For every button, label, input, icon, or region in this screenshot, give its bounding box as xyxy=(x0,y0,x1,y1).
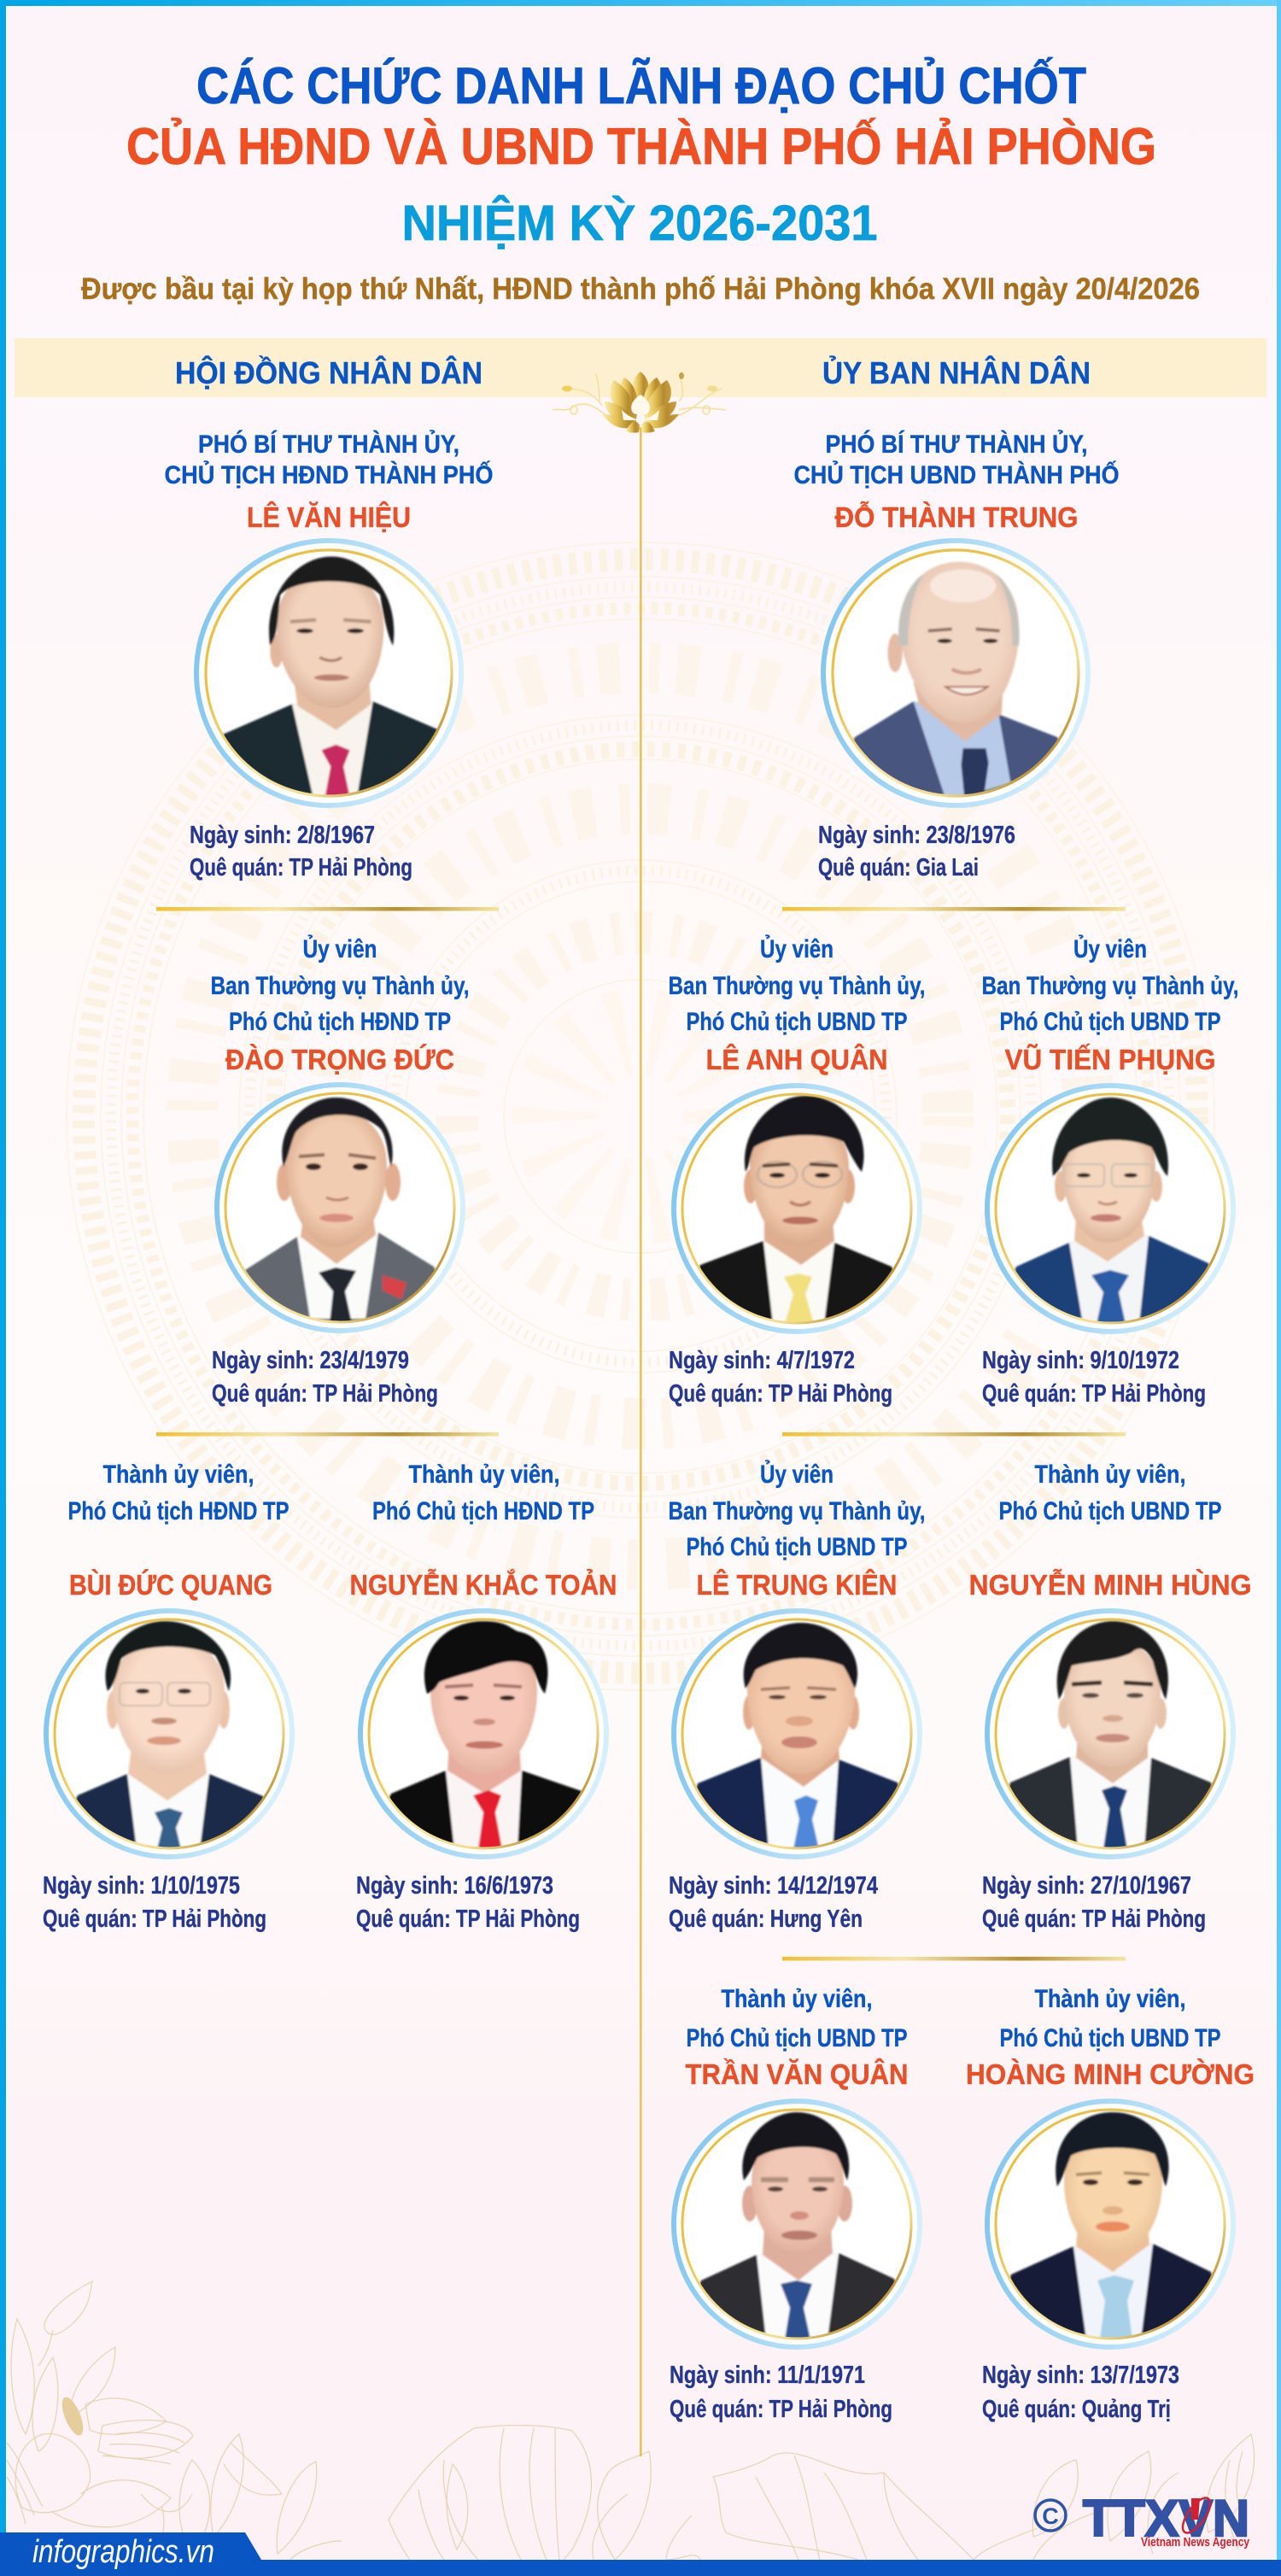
role: CHỦ TỊCH UBND THÀNH PHỐ xyxy=(794,460,1119,489)
person: Đào Trọng Đức xyxy=(210,934,470,1408)
info: Quê quán: TP Hải Phòng xyxy=(212,1380,438,1408)
role: Phó Chủ tịch UBND TP xyxy=(999,1008,1221,1036)
info: Quê quán: Gia Lai xyxy=(818,854,979,881)
info: Quê quán: TP Hải Phòng xyxy=(982,1380,1206,1408)
role: Ban Thường vụ Thành ủy, xyxy=(210,972,470,1000)
person: Trần Văn Quân xyxy=(670,1985,920,2423)
role xyxy=(687,1985,907,2052)
icon: golden lotus xyxy=(553,372,726,433)
role: Thành ủy viên, xyxy=(1035,1985,1185,2013)
portrait xyxy=(46,1611,292,1857)
info xyxy=(43,1872,266,1933)
name: LÊ ANH QUÂN xyxy=(705,1044,888,1075)
info: Ngày sinh: 27/10/1967 xyxy=(982,1872,1191,1900)
name: TRẦN VĂN QUÂN xyxy=(685,2058,909,2090)
name: HOÀNG MINH CƯỜNG xyxy=(966,2058,1255,2090)
logo: TTXVN: Vietnam News Agency xyxy=(1141,2535,1250,2550)
info: Quê quán: TP Hải Phòng xyxy=(190,854,412,881)
icon: copyright: C xyxy=(1042,2503,1059,2529)
person: Đỗ Thành Trung xyxy=(794,430,1119,881)
background: bronze drum pattern xyxy=(67,542,1214,1690)
role xyxy=(164,430,494,489)
title: CÁC CHỨC DANH LÃNH ĐẠO CHỦ CHỐT xyxy=(196,57,1086,114)
info: Ngày sinh: 13/7/1973 xyxy=(982,2362,1179,2389)
info: Quê quán: TP Hải Phòng xyxy=(43,1906,266,1933)
info xyxy=(982,1347,1206,1408)
name: NGUYỄN MINH HÙNG xyxy=(968,1569,1252,1601)
role xyxy=(982,934,1238,1036)
role: Phó Chủ tịch UBND TP xyxy=(687,2024,907,2052)
role: Thành ủy viên, xyxy=(1035,1461,1185,1489)
section band xyxy=(15,338,1266,397)
role: Phó Chủ tịch UBND TP xyxy=(687,1008,907,1036)
role: Thành ủy viên, xyxy=(102,1461,254,1489)
info: Ngày sinh: 14/12/1974 xyxy=(669,1872,878,1900)
name: ĐỖ THÀNH TRUNG xyxy=(835,501,1078,533)
role: Ủy viên xyxy=(302,934,377,963)
role: Ủy viên xyxy=(760,934,834,963)
divider xyxy=(782,907,1126,910)
role: Phó Chủ tịch UBND TP xyxy=(687,1533,907,1561)
person: Nguyễn Khắc Toản xyxy=(350,1461,617,1933)
info xyxy=(190,822,412,881)
title xyxy=(126,57,1156,175)
icon: lotus seed pod xyxy=(58,2394,87,2438)
divider xyxy=(782,1957,1126,1961)
role xyxy=(668,1460,926,1561)
role: Ban Thường vụ Thành ủy, xyxy=(668,1497,926,1525)
person: Bùi Đức Quang xyxy=(43,1461,292,1933)
divider xyxy=(782,1432,1126,1437)
role: Ủy viên xyxy=(760,1460,834,1489)
info xyxy=(669,1347,892,1408)
heading: Hội đồng nhân dân: HỘI ĐỒNG NHÂN DÂN xyxy=(175,354,483,390)
footer bar xyxy=(0,2532,1281,2576)
name: BÙI ĐỨC QUANG xyxy=(69,1569,272,1601)
info xyxy=(356,1872,580,1933)
info: Ngày sinh: 1/10/1975 xyxy=(43,1872,240,1900)
info xyxy=(982,2362,1179,2423)
role: Phó Chủ tịch UBND TP xyxy=(999,2024,1221,2052)
role xyxy=(210,934,470,1036)
role xyxy=(999,1985,1221,2052)
info xyxy=(212,1347,438,1408)
name: ĐÀO TRỌNG ĐỨC xyxy=(225,1044,454,1075)
info: Ngày sinh: 23/4/1979 xyxy=(212,1347,409,1374)
portrait xyxy=(987,1611,1233,1857)
name: LÊ TRUNG KIÊN xyxy=(697,1569,897,1601)
role xyxy=(668,934,926,1036)
info: Ngày sinh: 4/7/1972 xyxy=(669,1347,855,1374)
role: Thành ủy viên, xyxy=(408,1461,560,1489)
info xyxy=(982,1872,1206,1933)
portrait xyxy=(674,2101,920,2347)
info: Quê quán: TP Hải Phòng xyxy=(356,1906,580,1933)
info: Quê quán: Quảng Trị xyxy=(982,2396,1171,2423)
role: Phó Chủ tịch UBND TP xyxy=(999,1497,1221,1525)
background: lotus line art, bottom xyxy=(7,2281,1255,2560)
portrait xyxy=(987,1086,1233,1332)
role: Thành ủy viên, xyxy=(721,1985,873,2013)
portrait xyxy=(987,2101,1233,2347)
info: Ngày sinh: 23/8/1976 xyxy=(818,822,1015,849)
portrait xyxy=(196,541,461,805)
role: PHÓ BÍ THƯ THÀNH ỦY, xyxy=(198,430,459,459)
info xyxy=(670,2362,892,2423)
role: Ban Thường vụ Thành ủy, xyxy=(668,972,926,1000)
info: Quê quán: Hưng Yên xyxy=(669,1906,863,1933)
info: Ngày sinh: 16/6/1973 xyxy=(356,1872,553,1900)
name: NGUYỄN KHẮC TOẢN xyxy=(350,1569,617,1601)
divider xyxy=(156,1432,499,1437)
info: Ngày sinh: 11/1/1971 xyxy=(670,2362,865,2389)
info: Quê quán: TP Hải Phòng xyxy=(669,1380,892,1408)
role xyxy=(794,430,1119,489)
role: Phó Chủ tịch HĐND TP xyxy=(68,1497,289,1525)
info xyxy=(818,822,1015,881)
icon: copyright xyxy=(1035,2500,1066,2531)
portrait xyxy=(360,1611,606,1857)
divider xyxy=(156,907,499,910)
role: Phó Chủ tịch HĐND TP xyxy=(372,1497,594,1525)
person: Lê Trung Kiên xyxy=(668,1460,926,1933)
role xyxy=(68,1461,289,1525)
subtitle: term: NHIỆM KỲ 2026-2031 xyxy=(401,196,878,251)
person: Lê Văn Hiệu xyxy=(164,430,494,881)
info: Ngày sinh: 9/10/1972 xyxy=(982,1347,1179,1374)
portrait xyxy=(674,1086,920,1332)
person: Nguyễn Minh Hùng xyxy=(968,1461,1252,1933)
portrait xyxy=(674,1611,920,1857)
person: Lê Anh Quân xyxy=(668,934,926,1408)
person: Vũ Tiến Phụng xyxy=(982,934,1238,1408)
role: CHỦ TỊCH HĐND THÀNH PHỐ xyxy=(164,460,494,489)
role: Phó Chủ tịch HĐND TP xyxy=(229,1008,451,1036)
subtitle: election note: Được bầu tại kỳ họp thứ Nhất, HĐND thành phố Hải Phòng khóa XVII ngày 20/4/2026 xyxy=(81,272,1200,306)
name: VŨ TIẾN PHỤNG xyxy=(1004,1044,1216,1075)
title: CỦA HĐND VÀ UBND THÀNH PHỐ HẢI PHÒNG xyxy=(126,118,1156,175)
info: Quê quán: TP Hải Phòng xyxy=(982,1906,1206,1933)
logo: TTXVN: TTXVN xyxy=(1083,2490,1249,2547)
role: Ủy viên xyxy=(1073,934,1147,963)
role xyxy=(372,1461,594,1525)
info xyxy=(669,1872,878,1933)
role xyxy=(999,1461,1221,1525)
role: PHÓ BÍ THƯ THÀNH ỦY, xyxy=(825,430,1088,459)
footer: website: infographics.vn xyxy=(32,2534,214,2570)
heading: Ủy ban nhân dân: ỦY BAN NHÂN DÂN xyxy=(822,354,1091,390)
info: Ngày sinh: 2/8/1967 xyxy=(190,822,375,849)
info: Quê quán: TP Hải Phòng xyxy=(670,2396,892,2423)
portrait xyxy=(823,541,1088,805)
name: LÊ VĂN HIỆU xyxy=(247,501,411,533)
person: Hoàng Minh Cường xyxy=(966,1985,1255,2423)
center line xyxy=(640,427,642,2456)
portrait xyxy=(217,1085,463,1331)
